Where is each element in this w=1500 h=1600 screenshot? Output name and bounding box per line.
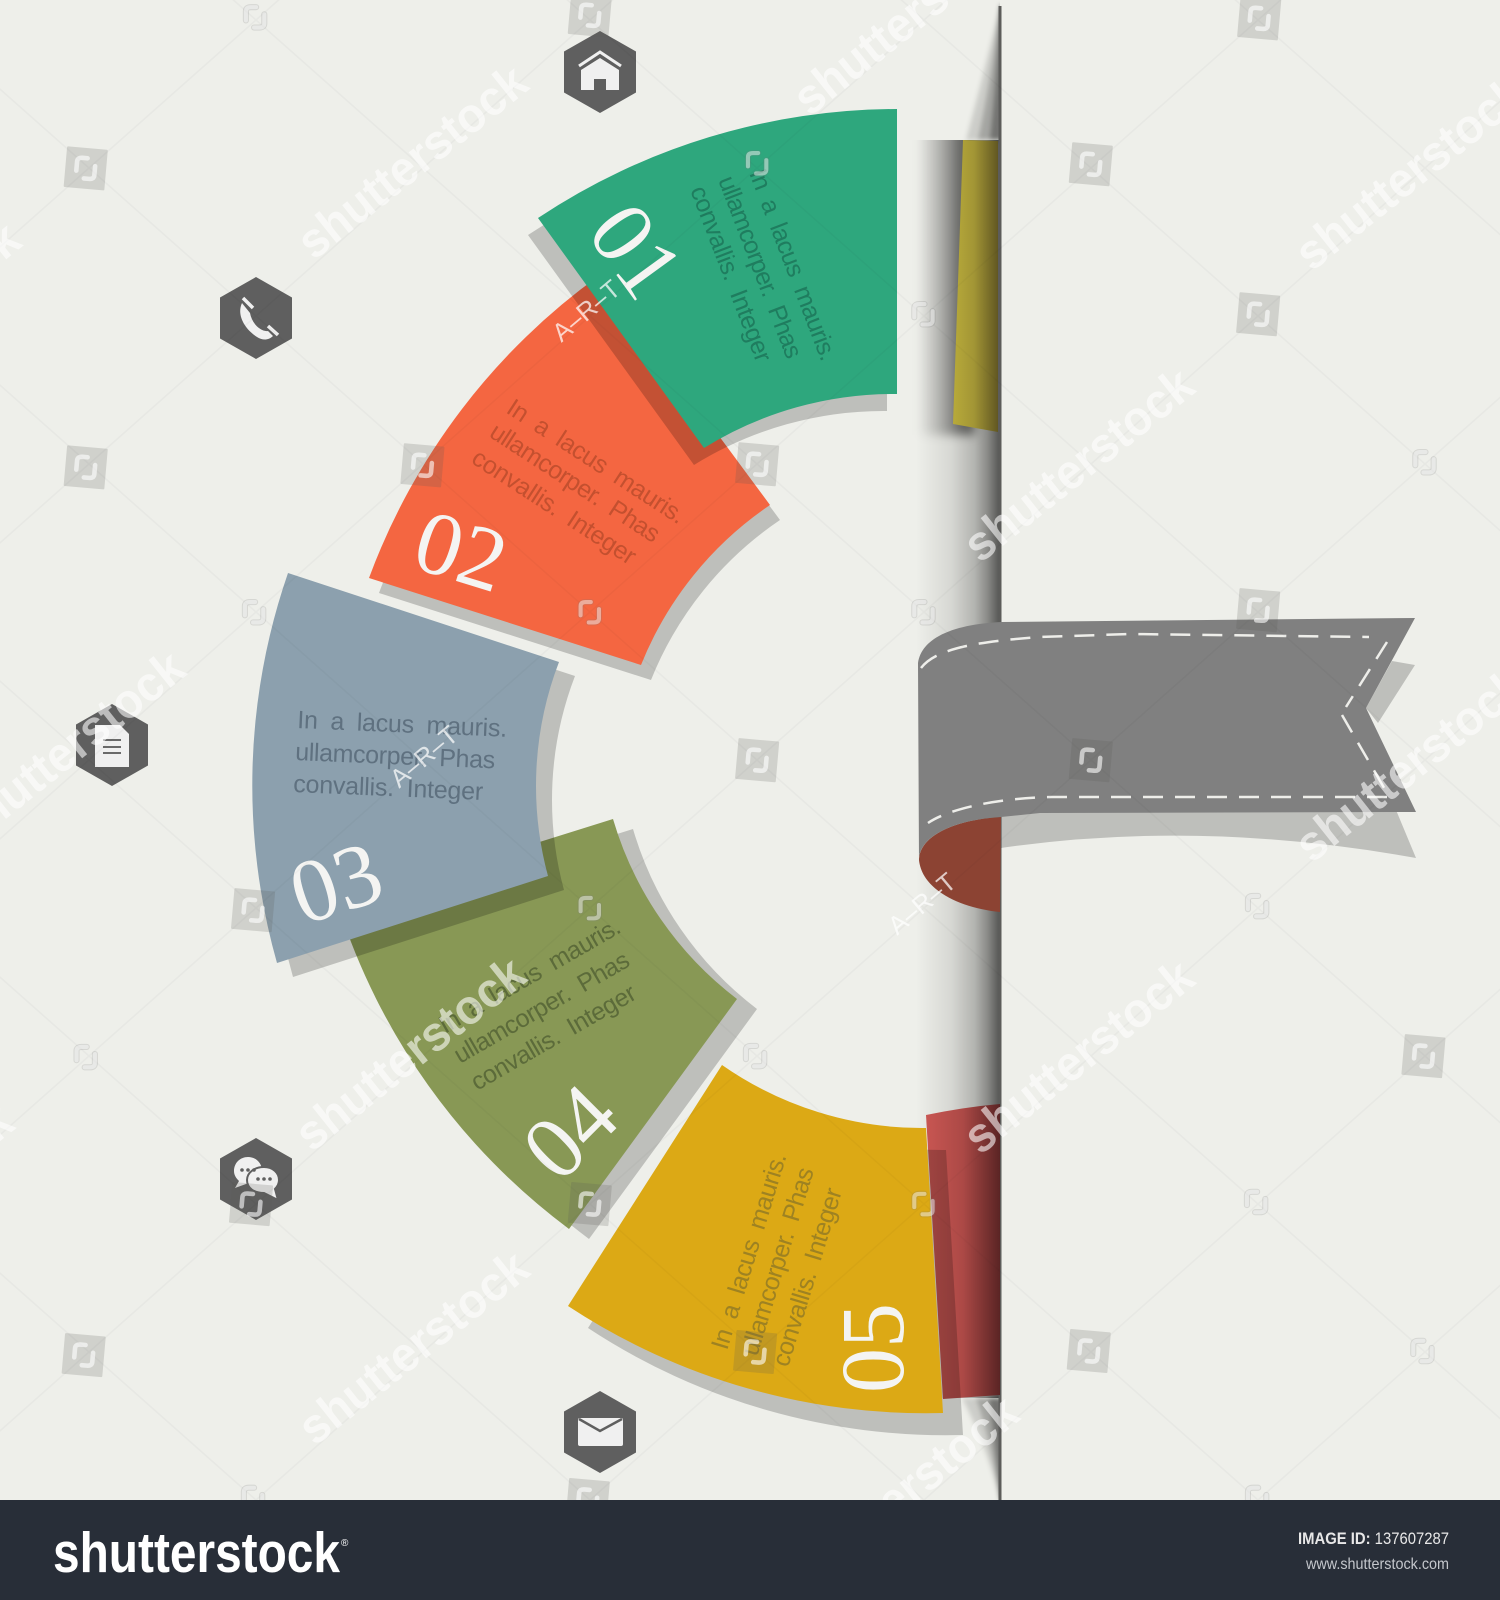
watermarks: shutterstock	[953, 357, 1205, 573]
segment 05 text: convallis. Integer	[767, 1185, 848, 1370]
segment 02 text	[467, 394, 691, 571]
watermarks: shutterstock	[285, 946, 536, 1161]
segment 04 text	[434, 912, 641, 1096]
icon: chat bubbles	[220, 1138, 292, 1220]
segment 05 shadow	[588, 1087, 963, 1435]
icon: home	[564, 31, 636, 113]
segment 04 text: In a lacus mauris.	[434, 912, 626, 1039]
segment 05 number: 05	[824, 1303, 923, 1393]
watermarks: A–R–T	[547, 275, 626, 347]
segment 02 text: convallis. Integer	[467, 444, 641, 571]
segment 02 number: 02	[403, 491, 518, 612]
ribbon banner	[918, 618, 1416, 912]
segment 02 shape	[369, 275, 770, 665]
segment 01 number: 01	[569, 186, 702, 317]
panel: segment 02 orange	[369, 275, 780, 680]
icon: mail	[564, 1391, 636, 1473]
segment 03 shadow	[268, 587, 575, 977]
segment 04 shape	[338, 819, 737, 1229]
segment 01 shape	[538, 109, 897, 448]
segment 05 shape	[568, 1065, 943, 1413]
segment 05 text: In a lacus mauris.	[706, 1149, 792, 1353]
segment 02 text: ullamcorper. Phas	[485, 418, 665, 548]
icon: phone	[220, 277, 292, 359]
segment 02 text: In a lacus mauris.	[502, 394, 691, 530]
segment 03 number: 03	[278, 822, 394, 944]
panel: segment 03 blue	[252, 573, 575, 977]
footer logo: shutterstock	[53, 1521, 340, 1585]
bookmark tab: olive	[922, 140, 998, 442]
ribbon shadow	[1001, 661, 1416, 858]
ribbon body	[918, 618, 1416, 860]
vertical slit with shadow band	[916, 5, 1004, 1500]
watermarks: A–R–T	[883, 868, 962, 940]
watermarks: shutterstock	[288, 1240, 539, 1455]
segment 02 shadow	[379, 290, 780, 680]
segment 03 text: ullamcorper. Phas	[295, 738, 496, 774]
segment 03 text: In a lacus mauris.	[297, 706, 508, 743]
segment 03 text	[293, 706, 508, 806]
segment 01 text: ullamcorper. Phas	[712, 172, 808, 362]
panel: segment 05 yellow	[568, 1065, 963, 1435]
bookmark tab: red	[926, 1104, 1000, 1399]
watermarks: shutterstock	[287, 54, 538, 269]
panel: segment 01 green	[528, 109, 897, 465]
segment 04 text: ullamcorper. Phas	[449, 946, 634, 1069]
registered mark: ®	[341, 1538, 349, 1549]
watermarks: shutterstock	[953, 949, 1205, 1164]
icon: document	[76, 704, 148, 786]
footer bar	[0, 1500, 1500, 1600]
ribbon fold underside	[919, 817, 1001, 912]
website: www.shutterstock.com	[1305, 1556, 1449, 1573]
segment 04 number: 04	[504, 1066, 637, 1199]
watermarks: A–R–T	[385, 721, 464, 793]
watermarks: shutterstock	[778, 1385, 1029, 1600]
segment 01 shadow	[528, 126, 887, 465]
panel: segment 04 olive	[338, 819, 757, 1239]
segment 01 text: convallis. Integer	[684, 182, 777, 366]
segment 05 text	[706, 1149, 848, 1370]
segment 03 shape	[252, 573, 559, 963]
image id: IMAGE ID: 137607287	[1298, 1529, 1449, 1548]
segment 05 text: ullamcorper. Phas	[736, 1164, 820, 1359]
segment 03 text: convallis. Integer	[293, 770, 484, 806]
segment 01 text: In a lacus mauris.	[743, 165, 842, 365]
segment 04 shadow	[358, 829, 757, 1239]
segment 01 text	[684, 165, 842, 366]
ribbon stitching	[921, 634, 1387, 823]
segment 04 text: convallis. Integer	[466, 979, 641, 1096]
